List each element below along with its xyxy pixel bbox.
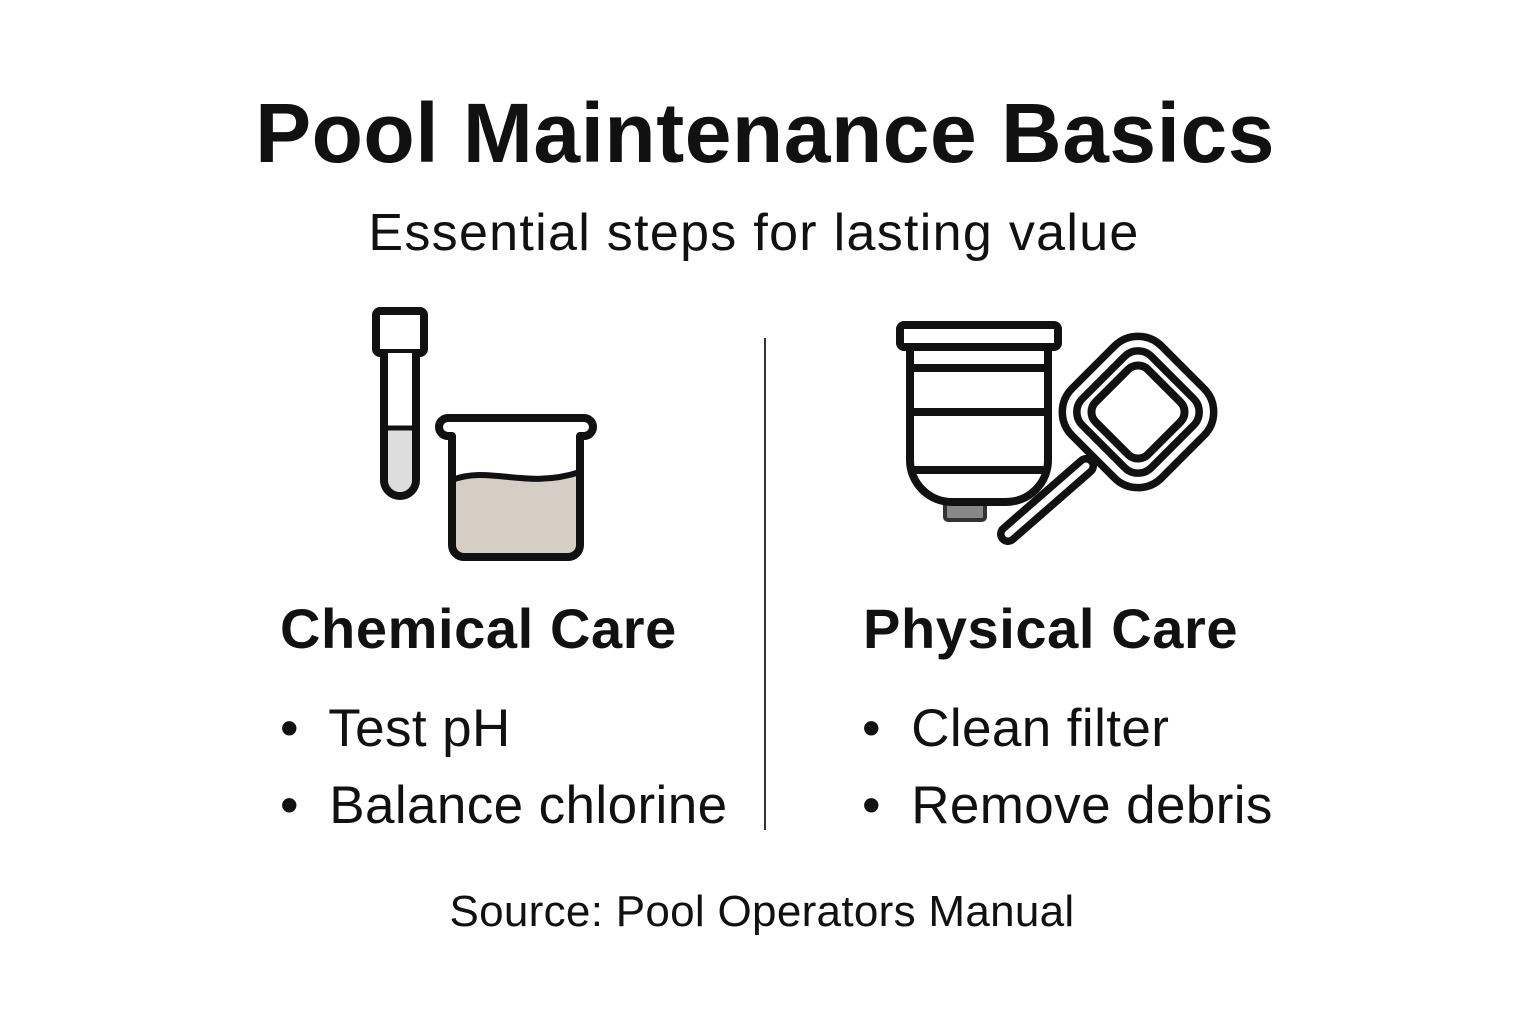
list: chemical: • Test pH <box>280 699 511 758</box>
divider <box>764 338 766 830</box>
title: Pool Maintenance Basics <box>255 86 1275 180</box>
list: chemical: • Balance chlorine <box>280 776 727 835</box>
heading: physical care: Physical Care <box>863 597 1238 660</box>
list: physical <box>862 699 1273 835</box>
icon: beaker <box>439 418 593 557</box>
list: physical: • Remove debris <box>862 776 1273 835</box>
icon: filter <box>900 325 1058 520</box>
icon: test tube <box>376 311 424 496</box>
heading: chemical care: Chemical Care <box>280 597 677 660</box>
list: chemical <box>280 699 727 835</box>
subtitle: Essential steps for lasting value <box>368 204 1140 262</box>
icon: skimmer net <box>1008 333 1217 534</box>
source: Source: Pool Operators Manual <box>449 887 1075 936</box>
list: physical: • Clean filter <box>862 699 1169 758</box>
